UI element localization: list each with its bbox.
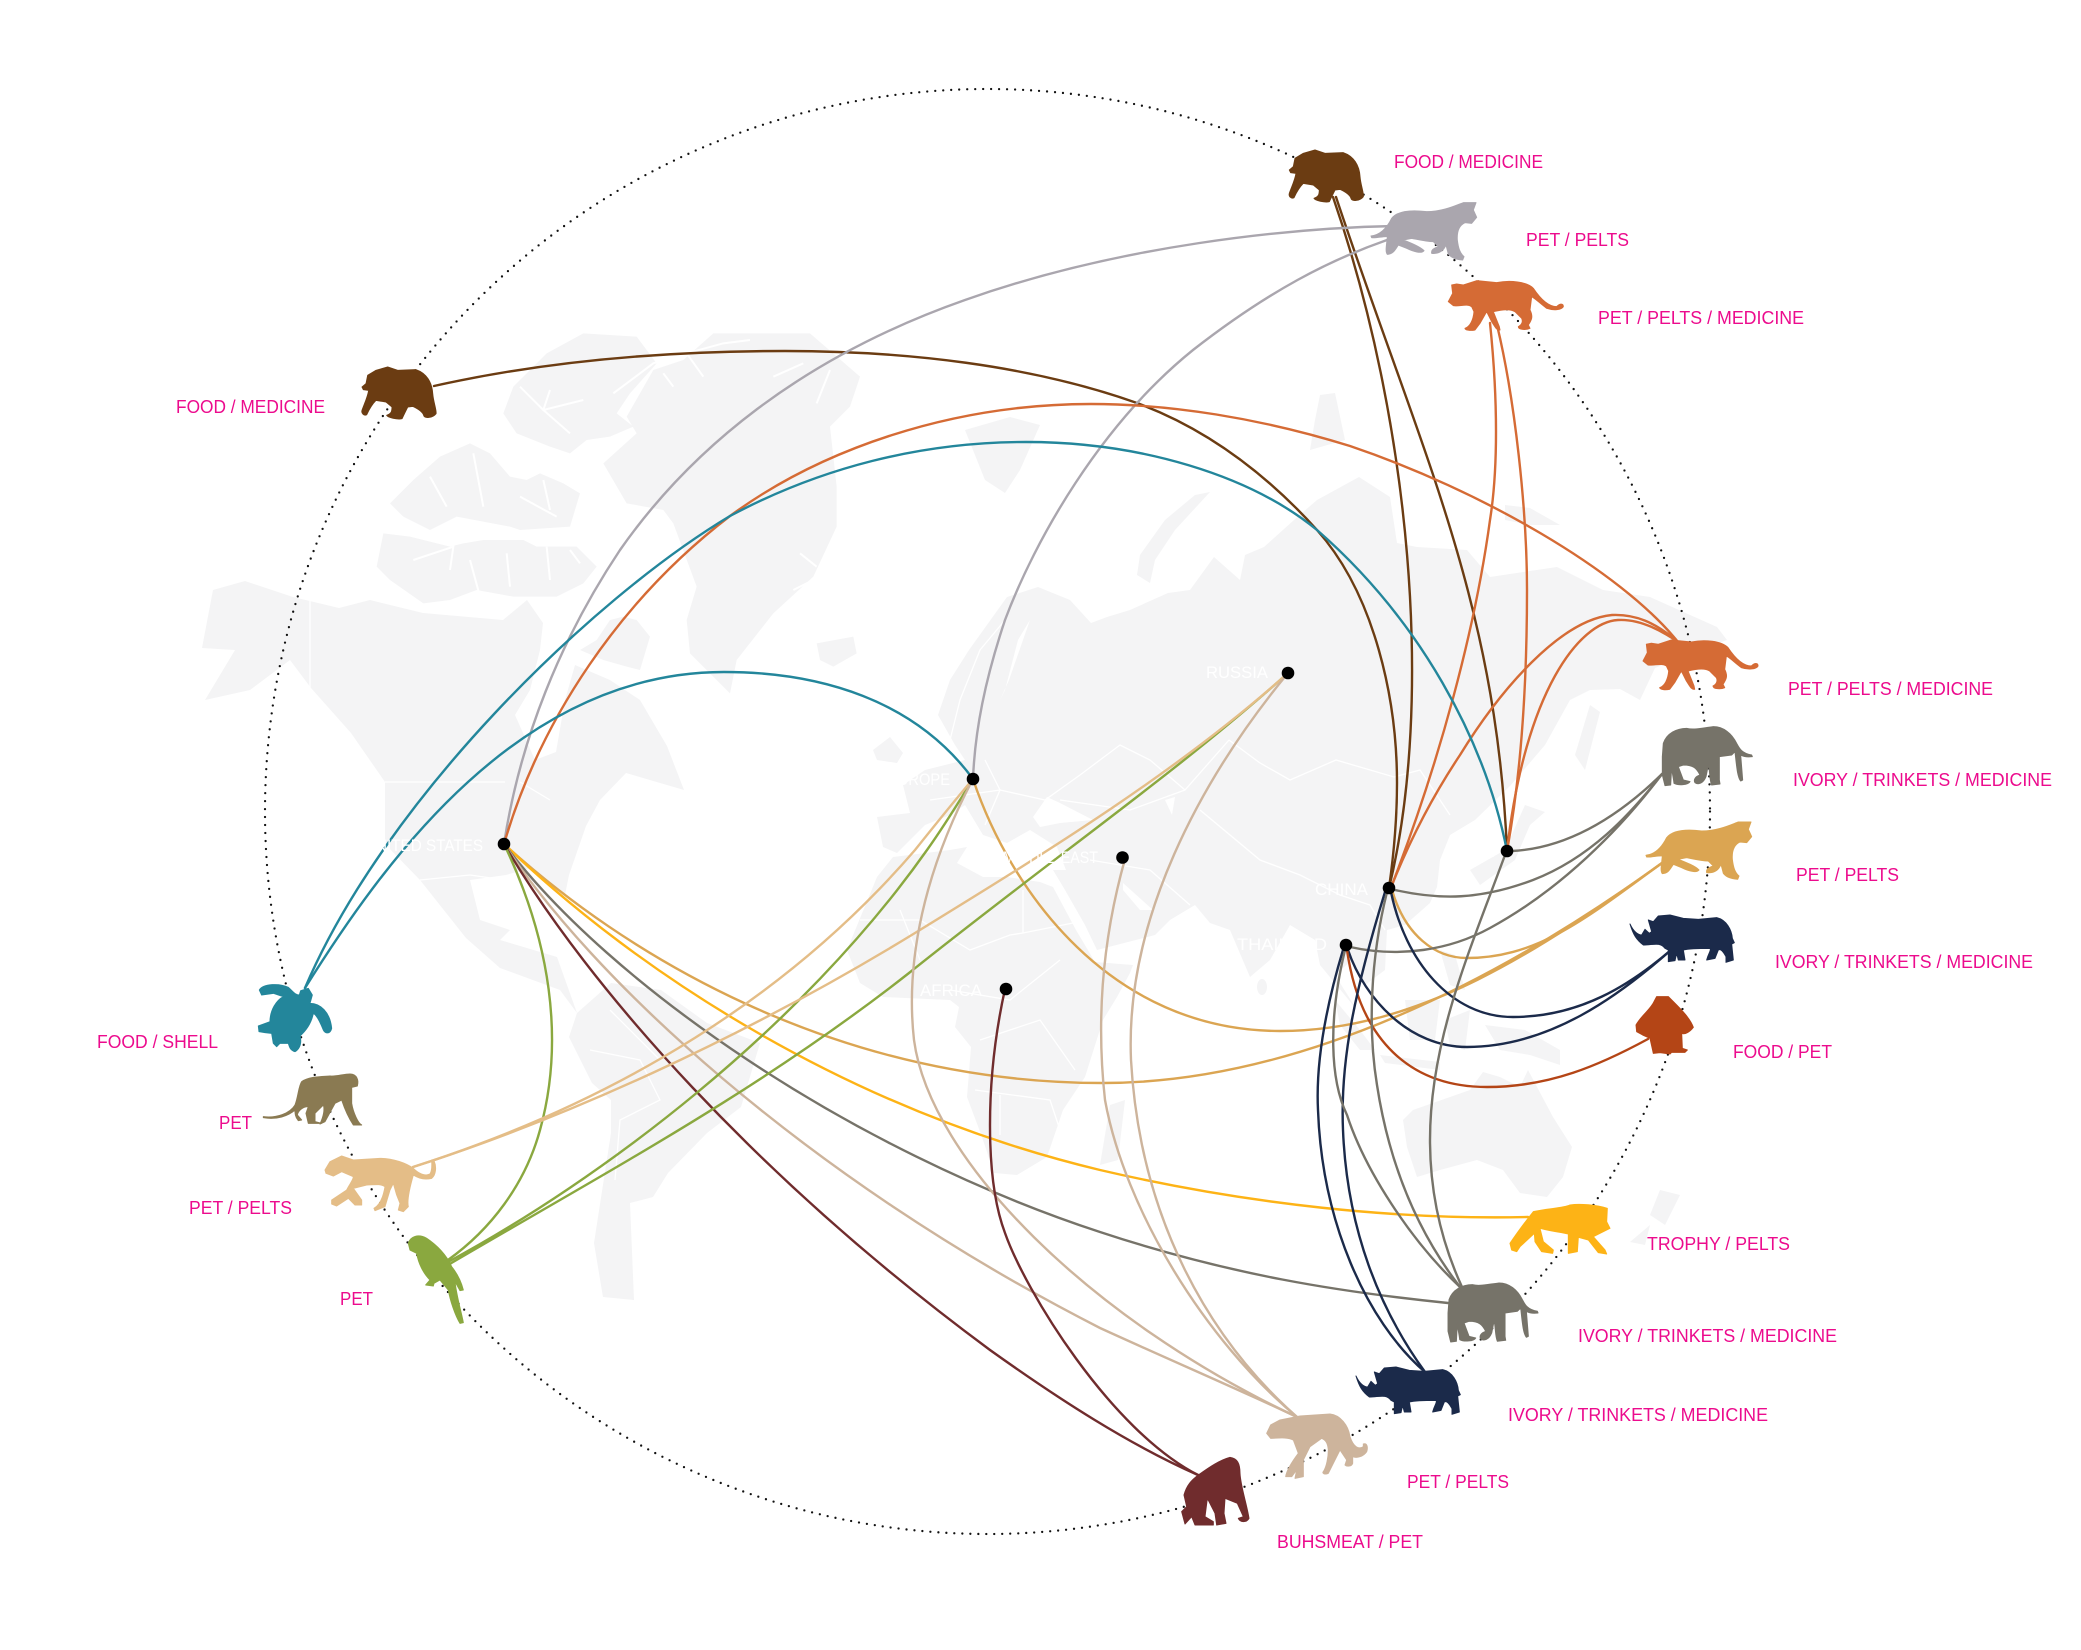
label: cheetah: PET / PELTS [1407,1472,1509,1492]
label: orangutan: FOOD / PET [1733,1042,1832,1062]
Severnaya Zemlya [1310,393,1345,450]
arc: brown bear to China [434,351,1397,888]
label: rhino right: IVORY / TRINKETS / MEDICINE [1775,952,2033,972]
arc: rhino (bottom) to China [1343,892,1425,1372]
label: China: CHINA [1315,880,1369,899]
icon: brown bear (left) [362,367,436,419]
Baffin Island [580,617,650,670]
arc: orangutan to Thailand [1347,950,1648,1087]
white fjords [413,340,830,597]
icon: orangutan [1636,997,1693,1054]
Japan [1470,805,1545,885]
United Kingdom [873,737,903,763]
Canadian Arctic islands [377,333,860,693]
arc: puma to United States [504,844,1662,1083]
dotted globe outline [265,89,1710,1534]
label: elephant right: IVORY / TRINKETS / MEDICINE [1793,770,2052,790]
arc: parrot to Russia [448,673,1288,1265]
icon: elephant (right) [1662,727,1752,786]
arc: puma to China [1392,863,1662,958]
hub: Europe [967,773,979,785]
Svalbard [965,417,1040,493]
label: Middle East: MIDDLE EAST [1003,848,1098,867]
trade hub markers [498,667,1513,995]
arc: turtle to Europe [305,672,973,988]
label: bear top: FOOD / MEDICINE [1394,152,1543,172]
arc: brown bear (top) to Japan [1336,197,1507,851]
Philippines and Sulawesi [1440,950,1470,1050]
label: jaguar: PET / PELTS [1526,230,1629,250]
arc: tiger (top) to China [1392,323,1496,885]
Eurasia [877,477,1727,1010]
arc: tiger (top) to Japan [1497,325,1527,851]
label: monkey: PET [219,1113,252,1133]
Madagascar [1100,1100,1125,1165]
hub: China [1383,882,1395,894]
label: tiger right: PET / PELTS / MEDICINE [1788,679,1993,699]
icon: sea turtle [258,985,332,1052]
arc: elephant (bottom) to United States [504,844,1448,1303]
world map background [202,333,1727,1300]
arc: cheetah to Middle East [1101,859,1297,1417]
icon: tan wild cat [325,1156,436,1212]
Iceland [817,637,857,667]
icon: tiger (top) [1448,281,1563,330]
arc: tiger (right) to China [1392,615,1678,885]
icon: puma [1646,822,1752,879]
icon: rhino (bottom) [1356,1367,1460,1414]
label: parrot: PET [340,1289,373,1309]
label: lion: TROPHY / PELTS [1647,1234,1790,1254]
arc: gorilla to Africa [990,989,1198,1475]
arc: cheetah to United States [504,844,1297,1417]
hub: Russia [1282,667,1294,679]
arc: puma to Europe [973,779,1662,1031]
label: elephant bottom: IVORY / TRINKETS / MEDICINE [1578,1326,1837,1346]
arc: gorilla to United States [504,844,1198,1475]
arc: cheetah to Russia [1131,673,1297,1417]
Sakhalin [1575,705,1600,770]
arc: parrot to United States [448,844,552,1260]
label: Japan: JAPAN [1445,842,1495,861]
icon: elephant (bottom) [1448,1283,1538,1342]
label: Europe: EUROPE [888,770,950,789]
Greenland [603,333,860,693]
label: rhino bottom: IVORY / TRINKETS / MEDICINE [1508,1405,1768,1425]
arc: lion to United States [504,844,1528,1217]
country borders [310,588,1450,1180]
arc: rhino (right) to China [1391,892,1671,1017]
label: tan cat: PET / PELTS [189,1198,292,1218]
inland seas [1000,620,1175,910]
use labels [97,152,2052,1552]
New Siberian Islands [1505,505,1560,525]
Sumatra, Java, Borneo [1335,1000,1440,1070]
icon: gorilla [1182,1457,1249,1525]
South America [569,983,760,1300]
arc: elephant (bottom) to China [1372,892,1460,1287]
arc: turtle to Japan [305,442,1507,988]
Queen Elizabeth Islands [390,443,580,530]
icon: lion [1510,1204,1610,1254]
Africa [847,847,1133,1175]
arc: elephant (bottom) to Thailand [1333,950,1460,1287]
Novaya Zemlya [1137,492,1210,583]
arc: rhino (bottom) to Thailand [1318,950,1425,1372]
arc: rhino (right) to Thailand [1348,950,1671,1047]
arc: tiger (right) to United States [504,404,1678,844]
label: gorilla: BUHSMEAT / PET [1277,1532,1423,1552]
Sri Lanka [1257,979,1267,995]
New Zealand [1630,1190,1680,1245]
label: United States: UNITED STATES [365,836,483,855]
label: bear left: FOOD / MEDICINE [176,397,325,417]
trade route arcs [305,197,1678,1475]
icon: jaguar [1371,203,1477,260]
icon: brown bear (top) [1289,150,1363,202]
country labels [365,663,1495,1000]
label: puma: PET / PELTS [1796,865,1899,885]
arc: cheetah to Europe [912,779,1297,1417]
arc: parrot to Europe [448,779,973,1262]
icon: monkey [263,1074,362,1125]
icon: cheetah [1267,1414,1367,1478]
arc: elephant (right) to China [1395,774,1662,897]
Ellesmere Island [503,333,657,453]
label: turtle: FOOD / SHELL [97,1032,218,1052]
label: tiger top: PET / PELTS / MEDICINE [1598,308,1804,328]
label: Africa: AFRICA [920,981,983,1000]
arc: elephant (bottom) to Japan [1430,855,1505,1287]
icon: rhino (right) [1630,915,1734,962]
icon: tiger (right) [1643,640,1758,690]
hub: Japan [1501,845,1513,857]
hub: Africa [1000,983,1012,995]
arc: brown bear (top) to China [1333,197,1412,888]
arc: jaguar to United States [504,226,1395,844]
Australia [1403,1070,1572,1197]
label: Russia: RUSSIA [1206,663,1269,682]
arc: jaguar to Europe [973,240,1387,779]
hub: Middle East [1116,851,1129,864]
arc: tiger (right) to Japan [1507,620,1678,851]
New Guinea [1485,1025,1560,1065]
arc: tan cat to Europe [413,779,973,1167]
hub: Thailand [1340,939,1352,951]
icon: parrot [408,1236,463,1323]
arc: elephant (right) to Japan [1512,774,1662,851]
arc: elephant (right) to Thailand [1350,774,1662,952]
Victoria and Banks Islands [377,533,597,603]
label: Thailand: THAILAND [1237,935,1327,954]
arc: tan cat to Russia [413,673,1288,1167]
North America [202,581,684,1013]
hub: United States [498,838,510,850]
